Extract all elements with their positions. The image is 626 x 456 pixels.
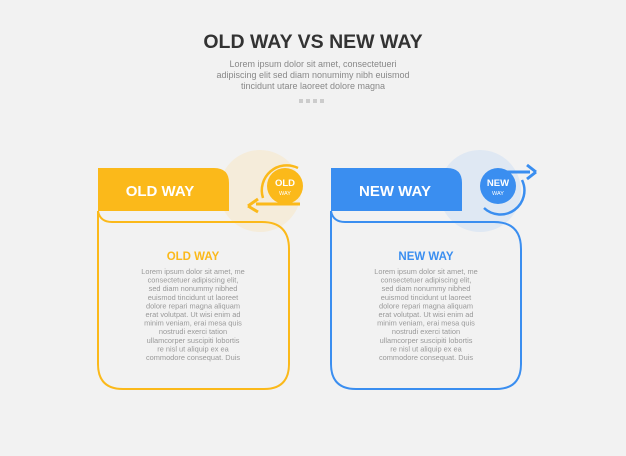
subtitle: adipiscing elit sed diam nonumimy nibh euismod xyxy=(216,70,410,80)
subtitle xyxy=(216,59,410,91)
subtitle: tincidunt utare laoreet dolore magna xyxy=(241,81,385,91)
body text: nostrudi exerci tation xyxy=(159,327,227,336)
body text: minim veniam, erai mesa quis xyxy=(144,319,242,328)
body text: minim veniam, erai mesa quis xyxy=(377,319,475,328)
tab: old way: OLD WAY xyxy=(126,183,194,200)
body text: euismod tincidunt ut laoreet xyxy=(148,293,238,302)
icon: old way badge: WAY xyxy=(279,191,291,197)
panel: new way xyxy=(331,150,536,389)
body text: ullamcorper suscipiti lobortis xyxy=(380,336,473,345)
icon: new way badge xyxy=(480,165,536,214)
heading: OLD WAY xyxy=(167,251,220,263)
body text: commodore consequat. Duis xyxy=(379,353,473,362)
body text xyxy=(141,267,245,362)
body text: dolore repari magna aliquam xyxy=(146,301,240,310)
body text: Lorem ipsum dolor sit amet, me xyxy=(374,267,478,276)
dots xyxy=(299,99,324,103)
panel: old way xyxy=(98,150,303,389)
body text: ullamcorper suscipiti lobortis xyxy=(147,336,240,345)
body text: re nisl ut aliquip ex ea xyxy=(157,344,230,353)
body text: erat volutpat. Ut wisi enim ad xyxy=(379,310,473,319)
body text: nostrudi exerci tation xyxy=(392,327,460,336)
body text: dolore repari magna aliquam xyxy=(379,301,473,310)
body text: sed diam nonummy nibhed xyxy=(382,284,470,293)
tab: old way xyxy=(98,168,229,211)
title: OLD WAY VS NEW WAY xyxy=(203,31,423,53)
body text: re nisl ut aliquip ex ea xyxy=(390,344,463,353)
body text: euismod tincidunt ut laoreet xyxy=(381,293,471,302)
body text: sed diam nonummy nibhed xyxy=(149,284,237,293)
body text: consectetuer adipiscing elit, xyxy=(381,276,471,285)
box outline xyxy=(331,211,521,389)
box outline xyxy=(98,211,289,389)
icon: new way badge: NEW xyxy=(487,178,509,189)
subtitle: Lorem ipsum dolor sit amet, consectetueri xyxy=(229,59,397,69)
tab: new way xyxy=(331,168,462,211)
body text: commodore consequat. Duis xyxy=(146,353,240,362)
body text: Lorem ipsum dolor sit amet, me xyxy=(141,267,245,276)
body text: consectetuer adipiscing elit, xyxy=(148,276,238,285)
body text xyxy=(374,267,478,362)
icon: new way badge: WAY xyxy=(492,191,504,197)
tab: new way: NEW WAY xyxy=(359,183,431,200)
body text: erat volutpat. Ut wisi enim ad xyxy=(146,310,240,319)
icon: old way badge: OLD xyxy=(275,178,295,189)
icon: old way badge xyxy=(248,165,303,212)
heading: NEW WAY xyxy=(398,251,454,263)
